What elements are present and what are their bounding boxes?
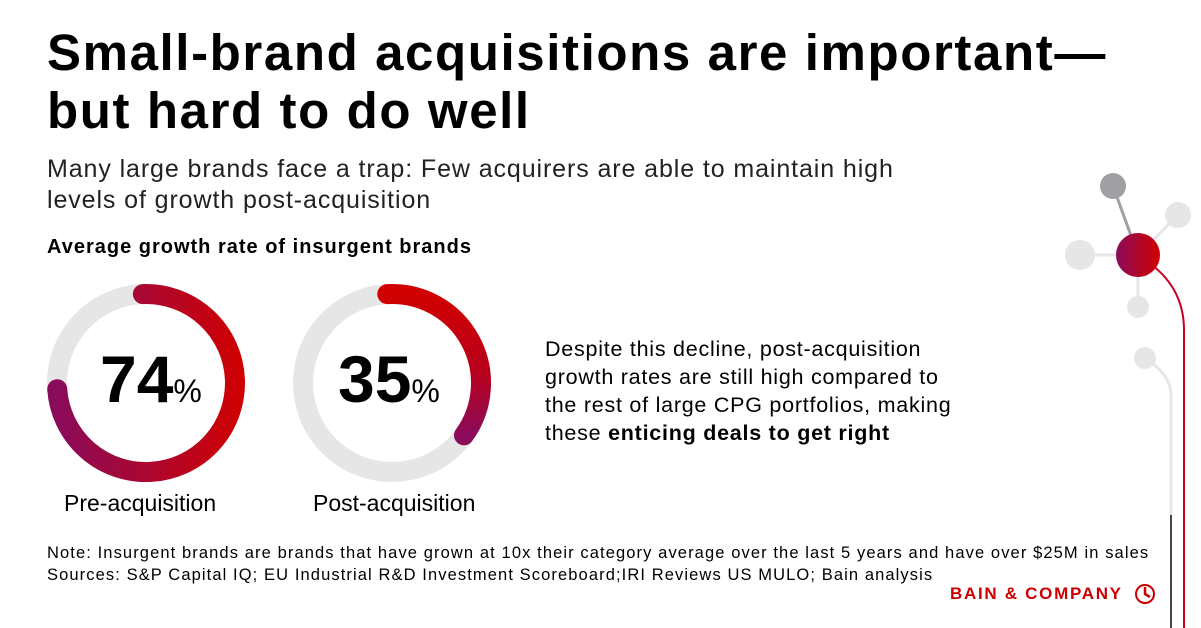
label: pre-acquisition: Pre-acquisition: [64, 490, 216, 516]
donut charts: [47, 284, 491, 482]
subtitle: [47, 155, 894, 214]
donut: pre-acquisition 74%: [57, 294, 235, 472]
donut: pre-acquisition 74%: 74%: [100, 342, 202, 416]
note and sources: [47, 544, 1149, 584]
logo: Bain & Company: BAIN & COMPANY: [950, 584, 1123, 603]
note and sources: Note: Insurgent brands are brands that have grown at 10x their category average over the last 5 years and have over $25M in sales: [47, 544, 1149, 562]
callout text: the rest of large CPG portfolios, making: [545, 393, 951, 417]
callout text: these enticing deals to get right: [545, 421, 890, 445]
decorative network graphic: [1065, 173, 1191, 628]
chart heading: Average growth rate of insurgent brands: [47, 236, 472, 258]
title: Small-brand acquisitions are important—: [47, 24, 1107, 81]
callout text: growth rates are still high compared to: [545, 365, 939, 389]
title: but hard to do well: [47, 82, 531, 139]
donut: post-acquisition 35%: 35%: [338, 342, 440, 416]
callout text: [545, 337, 951, 445]
title: [47, 24, 1107, 139]
callout text: Despite this decline, post-acquisition: [545, 337, 921, 361]
subtitle: levels of growth post-acquisition: [47, 186, 431, 214]
donut: post-acquisition 35%: [303, 294, 481, 472]
note and sources: Sources: S&P Capital IQ; EU Industrial R&D Investment Scoreboard;IRI Reviews US MULO; Bain analysis: [47, 566, 933, 584]
subtitle: Many large brands face a trap: Few acquirers are able to maintain high: [47, 155, 894, 183]
label: post-acquisition: Post-acquisition: [313, 490, 475, 516]
